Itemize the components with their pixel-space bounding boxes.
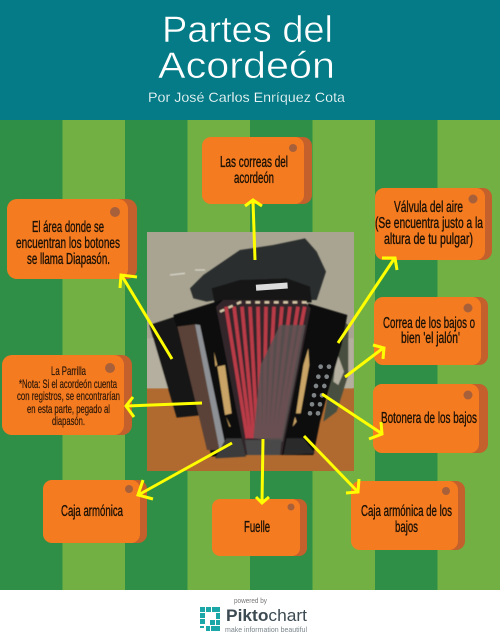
arrow: parrilla	[126, 397, 202, 417]
card: correa de los bajos: bien 'el jalón'	[401, 330, 460, 347]
powered by: powered by	[234, 596, 267, 605]
card: la parrilla: en esta parte, pegado al	[27, 402, 110, 416]
card: la parrilla: La Parrilla	[51, 364, 86, 378]
card: diapasón	[7, 199, 137, 279]
striped green field background	[0, 120, 500, 590]
header band	[0, 0, 500, 120]
card: fuelle	[212, 499, 307, 556]
subtitle: Por José Carlos Enríquez Cota	[148, 89, 345, 105]
footer	[0, 590, 500, 640]
card: válvula del aire: Válvula del aire	[394, 199, 463, 216]
arrow: diapasón	[120, 275, 172, 359]
arrow: botonera	[322, 394, 382, 439]
accordion photo	[140, 232, 354, 471]
wordmark: Piktochart	[226, 606, 307, 625]
arrow: caja armónica	[138, 443, 232, 499]
arrow: fuelle	[256, 439, 269, 503]
wordmark: make information beautiful	[225, 625, 307, 634]
card: fuelle: Fuelle	[244, 519, 270, 536]
arrow: correa de los bajos	[345, 345, 384, 377]
wordmark	[225, 606, 307, 634]
card: la parrilla	[2, 355, 132, 435]
arrow: caja armónica de los bajos	[304, 436, 359, 493]
card: diapasón: se llama Diapasón.	[27, 251, 110, 268]
title	[158, 9, 335, 86]
arrow: correas	[245, 200, 262, 260]
card: las correas: Las correas del	[220, 154, 288, 171]
card: válvula del aire	[375, 188, 492, 260]
card: caja armónica: Caja armónica	[61, 503, 123, 520]
arrow: válvula	[338, 258, 397, 343]
card: las correas: acordeón	[234, 170, 274, 187]
card: botonera de los bajos	[373, 384, 488, 453]
title: Partes del	[162, 9, 333, 50]
title: Acordeón	[158, 45, 335, 86]
card: caja armónica de los bajos: bajos	[395, 519, 418, 536]
card: correa de los bajos	[374, 297, 488, 365]
card: diapasón: El área donde se	[32, 219, 104, 236]
card: la parrilla: con registros, se encontrarían	[17, 389, 120, 403]
card: la parrilla: diapasón.	[52, 414, 85, 428]
card: caja armónica de los bajos	[351, 481, 465, 550]
card: caja armónica	[43, 480, 147, 543]
card: las correas	[202, 137, 312, 204]
card: diapasón: encuentran los botones	[16, 235, 120, 252]
card: la parrilla: *Nota: Si el acordeón cuenta	[19, 377, 117, 391]
icon: piktochart logo	[200, 607, 220, 631]
